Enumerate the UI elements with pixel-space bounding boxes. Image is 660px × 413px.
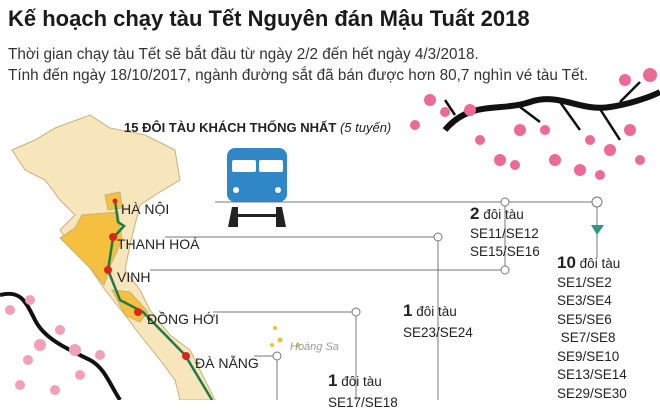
- label: 10 pairs: SE29/SE30: [557, 386, 627, 400]
- label: 1 pair SE17: [328, 371, 398, 410]
- city dots: [104, 198, 190, 360]
- intro text: Tính đến ngày 18/10/2017, ngành đường sắt đã bán được hơn 80,7 nghìn vé tàu Tết.: [8, 67, 588, 84]
- label: 2 pairs: 2 đôi tàu: [470, 204, 524, 223]
- label: 2 pairs: SE15/SE16: [470, 244, 540, 259]
- train icon: [227, 148, 287, 227]
- label: 2 pairs: [470, 204, 540, 259]
- label: 1 pair SE23: [403, 301, 473, 340]
- blossom: top right: [410, 68, 660, 180]
- label: 1 pair SE23: SE23/SE24: [403, 325, 473, 340]
- city labels: ĐÀ NẴNG: [195, 355, 259, 371]
- heading: 15 pairs: 15 ĐÔI TÀU KHÁCH THỐNG NHẤT (5 tuyến): [124, 120, 391, 135]
- title: Kế hoạch chạy tàu Tết Nguyên đán Mậu Tuất 2018: [8, 6, 530, 31]
- label: 1 pair SE23: 1 đôi tàu: [403, 301, 457, 320]
- connector lines: [150, 197, 602, 400]
- intro text: Thời gian chạy tàu Tết sẽ bắt đầu từ ngày 2/2 đến hết ngày 4/3/2018.: [8, 46, 479, 63]
- label: 10 pairs: SE5/SE6: [557, 312, 612, 326]
- Hoang Sa islands: [270, 326, 300, 347]
- label: 10 pairs: SE3/SE4: [557, 293, 612, 308]
- main graphic: Hoàng Sa: [290, 341, 339, 353]
- label: 10 pairs: SE7/SE8: [561, 330, 616, 345]
- city labels: THANH HOÁ: [117, 236, 199, 252]
- label: 10 pairs: SE9/SE10: [557, 348, 619, 364]
- city labels: [117, 201, 259, 371]
- label: 2 pairs: SE11/SE12: [470, 226, 539, 240]
- city labels: VINH: [117, 269, 150, 285]
- label: 10 pairs: [557, 253, 627, 400]
- label: 10 pairs: SE1/SE2: [557, 274, 612, 290]
- city labels: HÀ NỘI: [121, 201, 169, 217]
- intro text: [8, 45, 588, 84]
- blossom: left: [0, 294, 120, 400]
- map of Vietnam: [12, 115, 215, 400]
- arrow: [591, 225, 604, 235]
- label: 10 pairs: SE13/SE14: [557, 367, 627, 382]
- railway line: [108, 200, 212, 400]
- label: 1 pair SE17: SE17/SE18: [328, 395, 398, 410]
- label: 1 pair SE17: 1 đôi tàu: [328, 371, 382, 390]
- city labels: ĐỒNG HỚI: [147, 311, 219, 327]
- label: 10 pairs: 10 đôi tàu: [557, 253, 620, 272]
